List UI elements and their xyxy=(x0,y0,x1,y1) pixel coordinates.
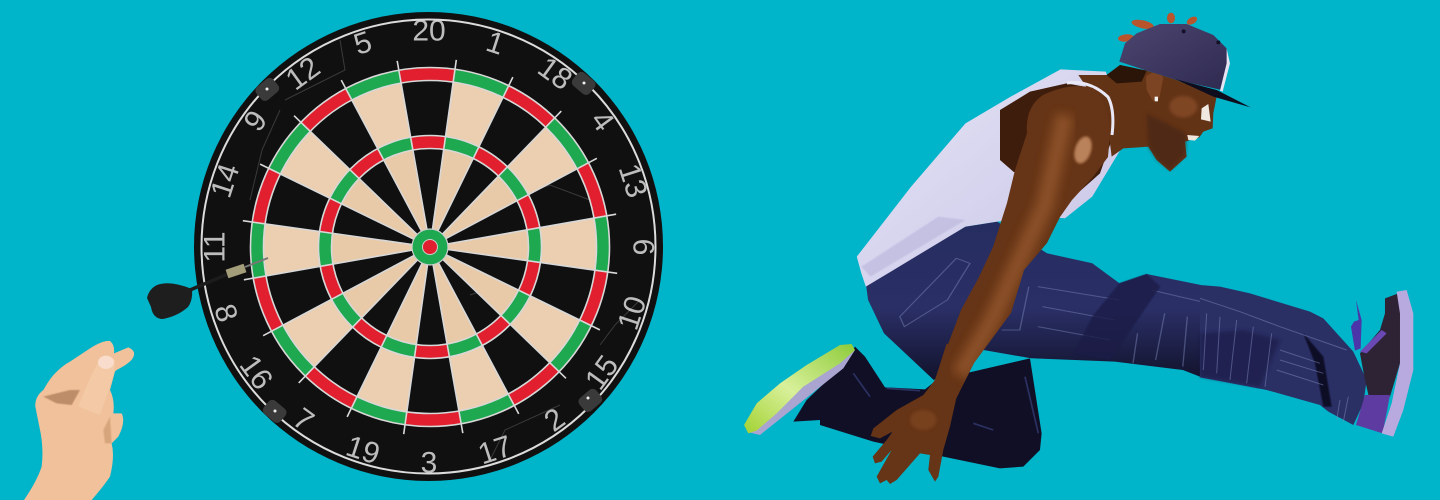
dart tip xyxy=(245,258,268,267)
inner single sectors xyxy=(364,181,496,313)
number ring: 5 xyxy=(350,25,376,62)
mouth teeth xyxy=(1187,135,1199,141)
jeans creases xyxy=(900,258,1201,367)
number ring: 6 xyxy=(626,239,660,255)
bent leg and left shoe xyxy=(744,344,1042,468)
shoulder highlight xyxy=(1071,134,1095,166)
tank top xyxy=(857,69,1120,287)
spider wires xyxy=(243,60,617,434)
number ring: 15 xyxy=(579,350,625,396)
number ring: 12 xyxy=(280,51,326,97)
knee dark patch xyxy=(1074,274,1160,360)
ear xyxy=(1146,73,1163,101)
number ring: 20 xyxy=(412,14,446,48)
double ring xyxy=(230,47,630,447)
number ring: 4 xyxy=(584,105,620,138)
jeans wrinkles xyxy=(1200,298,1348,422)
cap eyelets xyxy=(1182,29,1186,33)
shoe heel xyxy=(1356,395,1390,433)
bracket clips xyxy=(253,70,604,425)
dart flight xyxy=(147,283,192,319)
hand shading xyxy=(43,390,80,405)
bent leg highlights xyxy=(853,373,1038,433)
arm xyxy=(931,86,1110,407)
number ring xyxy=(198,14,660,480)
number ring: 17 xyxy=(474,430,516,471)
arm light band xyxy=(960,115,1065,375)
torso shadow xyxy=(1000,83,1112,200)
dart shaft xyxy=(190,274,228,290)
dart barrel xyxy=(227,268,245,274)
number ring: 13 xyxy=(612,160,653,202)
left shoe sole edge xyxy=(750,350,855,435)
outer single sectors xyxy=(273,90,587,404)
reaching hand xyxy=(871,343,973,484)
number ring: 8 xyxy=(207,300,244,326)
finger crease shading xyxy=(103,417,112,443)
dart xyxy=(147,258,268,319)
hand xyxy=(24,341,134,500)
board cracks xyxy=(250,40,640,460)
number ring: 7 xyxy=(287,402,320,438)
bent lower leg xyxy=(793,347,1042,468)
face highlight xyxy=(1169,96,1197,117)
treble ring xyxy=(308,125,552,369)
thumb xyxy=(78,357,115,415)
board body xyxy=(194,12,663,481)
shoe upper xyxy=(1360,293,1402,402)
jeans hips and thigh xyxy=(866,222,1201,380)
dartboard xyxy=(194,12,663,481)
shirt shadow lines xyxy=(861,217,965,277)
number ring: 1 xyxy=(482,25,508,62)
cap xyxy=(1119,24,1251,107)
neck and head xyxy=(1078,65,1217,172)
number ring: 2 xyxy=(538,402,571,438)
number ring: 14 xyxy=(205,160,246,202)
extended leg and right shoe xyxy=(1200,285,1413,437)
number ring: 11 xyxy=(198,231,232,263)
shoe lace xyxy=(1351,300,1362,351)
head and cap xyxy=(1000,13,1251,200)
number ring: 9 xyxy=(238,105,274,138)
fingers on head xyxy=(1118,13,1199,42)
bullseye xyxy=(412,229,448,265)
knuckle shading xyxy=(910,410,937,430)
upper body and thigh xyxy=(857,69,1201,380)
lower jeans xyxy=(1200,285,1367,425)
shoe sole xyxy=(1382,290,1413,437)
thumb nail xyxy=(98,356,114,369)
shoulder strap xyxy=(1067,83,1113,135)
number ring: 10 xyxy=(612,292,653,334)
number ring: 19 xyxy=(342,430,384,471)
outer wire ring xyxy=(202,20,656,474)
number ring: 18 xyxy=(532,51,578,97)
number ring: 3 xyxy=(421,446,437,480)
shoe purple collar xyxy=(1360,330,1387,353)
eye glint xyxy=(1201,104,1211,122)
earring xyxy=(1155,97,1158,101)
number ring: 16 xyxy=(233,350,279,396)
jeans dark folds xyxy=(1200,330,1280,387)
cap visor xyxy=(1175,79,1251,107)
hair xyxy=(1107,65,1147,83)
cap edge highlight xyxy=(1220,48,1230,92)
left shoe sole xyxy=(744,344,855,433)
jumping man xyxy=(744,13,1413,484)
jaw shade xyxy=(1147,113,1187,170)
